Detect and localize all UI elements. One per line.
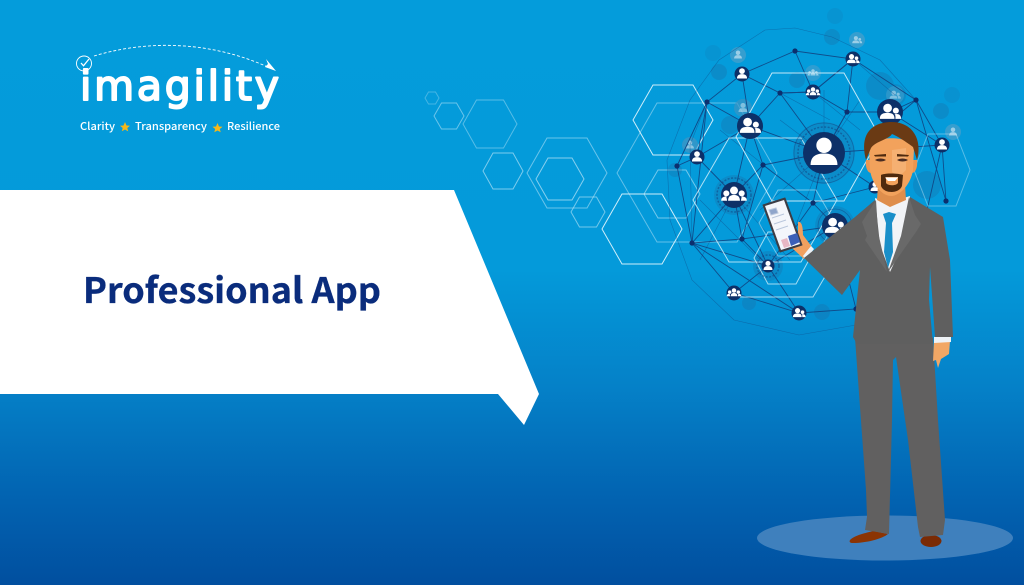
faded avatars: [682, 32, 961, 153]
floor shadow ellipse: [757, 516, 1013, 560]
mouth: [885, 178, 898, 181]
icon: check circle: [76, 56, 92, 71]
necktie: [883, 212, 896, 268]
avatar nodes: [690, 52, 950, 320]
neck: [877, 185, 906, 207]
faded background blobs: [668, 8, 960, 320]
tagline: Resilience: [227, 119, 280, 134]
network links: [677, 51, 946, 313]
small dots: [674, 48, 949, 312]
tagline: Clarity: [80, 119, 115, 134]
network globe: [667, 8, 970, 335]
tagline: [80, 119, 280, 134]
white title banner: [0, 190, 539, 425]
hexagon decoration: [425, 85, 777, 264]
ears: [866, 160, 917, 173]
trousers: [855, 338, 945, 537]
shirt collar: [875, 196, 910, 272]
logo wordmark: imagility: [80, 62, 279, 110]
inner white hexagons: [693, 73, 970, 297]
raised hand: [792, 222, 812, 259]
shirt cuffs: [803, 246, 951, 343]
shoes: [850, 531, 942, 547]
suit jacket: [804, 197, 953, 344]
businessman figure: [763, 122, 953, 547]
dashed flight path: [94, 45, 270, 68]
lapels: [862, 197, 921, 272]
title: Professional App: [83, 263, 381, 314]
face: [869, 138, 914, 196]
hair: [864, 122, 919, 160]
phone: [763, 198, 802, 252]
tagline: Transparency: [135, 119, 207, 134]
face highlight: [892, 148, 906, 178]
lowered hand: [933, 341, 950, 368]
node halos: [717, 123, 854, 277]
goatee: [881, 174, 903, 192]
logo: imagility: [76, 45, 280, 134]
icon: paper plane: [265, 59, 276, 71]
eyes and brows: [874, 154, 909, 162]
